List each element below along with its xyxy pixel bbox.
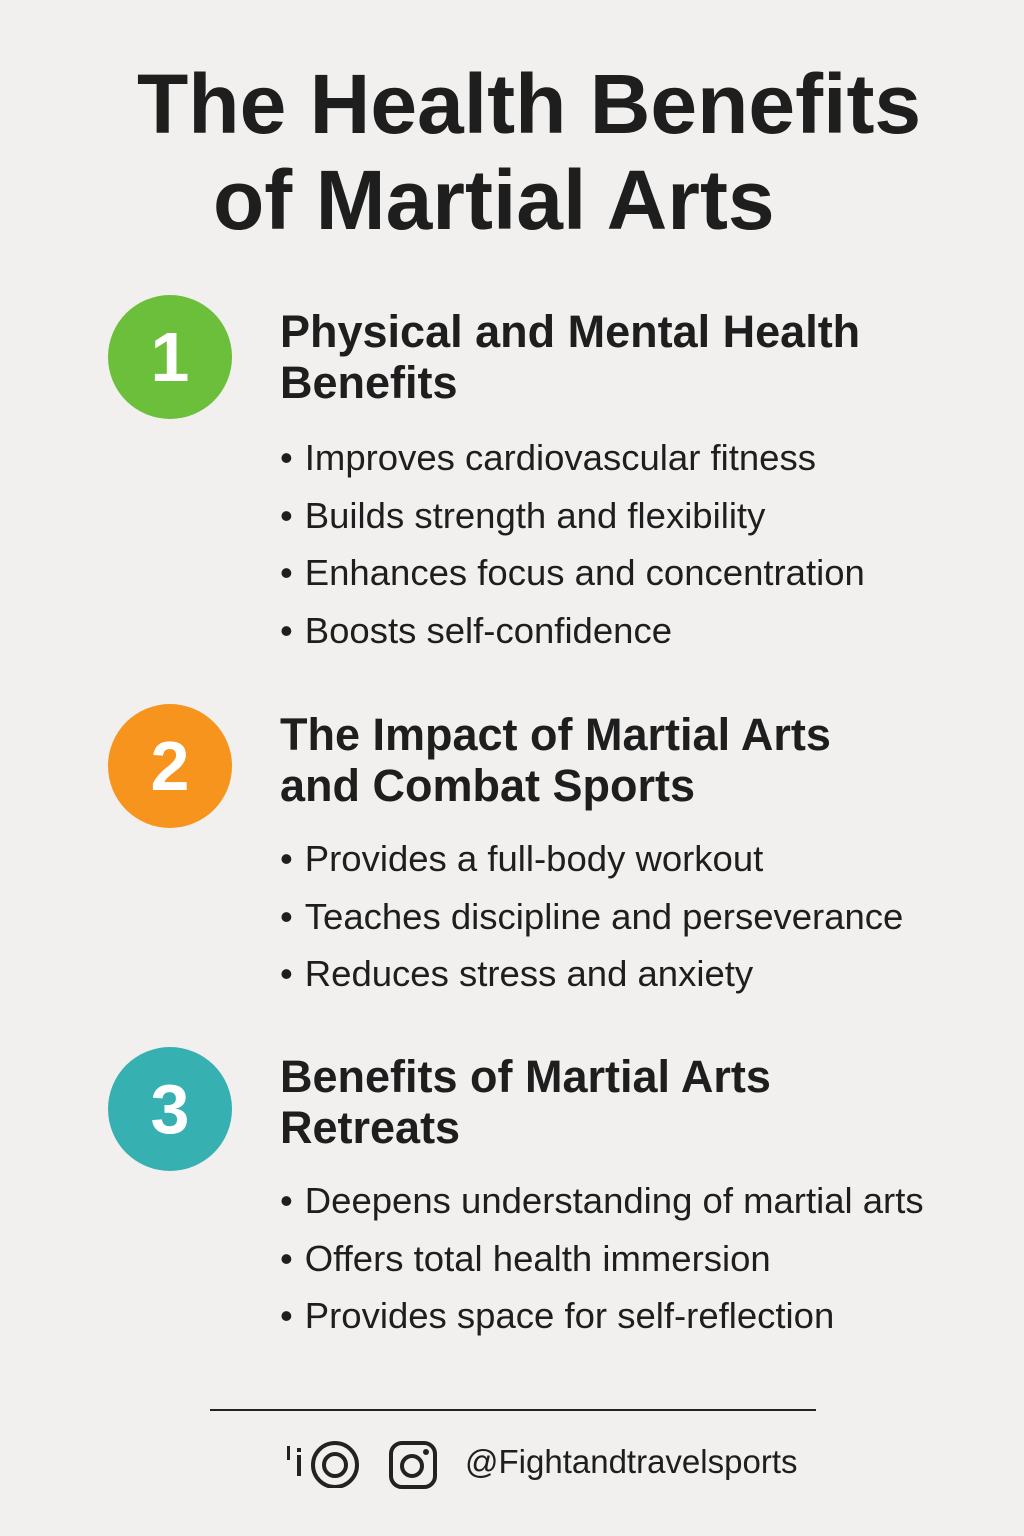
list 2: Provides a full-body workout (305, 838, 763, 879)
list 2 (282, 838, 903, 994)
list 3: Deepens understanding of martial arts (305, 1180, 924, 1221)
title (137, 57, 921, 247)
badge 2: 2 (151, 727, 189, 805)
badge 1 (108, 295, 232, 419)
list 1: Enhances focus and concentration (305, 552, 865, 593)
icon: logo (287, 1441, 359, 1488)
list 3 (282, 1180, 924, 1336)
badge 2 (108, 704, 232, 828)
list 1: Boosts self-confidence (305, 610, 672, 650)
heading 1: Benefits (280, 357, 458, 408)
heading 1 (280, 306, 860, 408)
list 2: Teaches discipline and perseverance (305, 896, 903, 936)
icon: instagram (389, 1441, 437, 1489)
title: of Martial Arts (213, 153, 775, 247)
heading 2: and Combat Sports (280, 760, 695, 811)
badge 3 (108, 1047, 232, 1171)
heading 2: The Impact of Martial Arts (280, 709, 831, 760)
badge 1: 1 (151, 318, 189, 396)
list 3: Offers total health immersion (305, 1238, 771, 1278)
heading 1: Physical and Mental Health (280, 306, 860, 357)
badge 3: 3 (151, 1070, 189, 1148)
heading 3 (280, 1051, 771, 1153)
list 1: Builds strength and flexibility (305, 494, 765, 536)
heading 2 (280, 709, 831, 811)
footer (287, 1441, 797, 1489)
heading 3: Benefits of Martial Arts (280, 1051, 771, 1102)
list 1: Improves cardiovascular fitness (305, 437, 816, 478)
list 3: Provides space for self-reflection (305, 1295, 834, 1336)
title: The Health Benefits (137, 57, 921, 151)
list 2: Reduces stress and anxiety (305, 953, 753, 994)
list 1 (282, 437, 865, 650)
handle: @Fightandtravelsports (465, 1443, 797, 1480)
heading 3: Retreats (280, 1102, 460, 1153)
